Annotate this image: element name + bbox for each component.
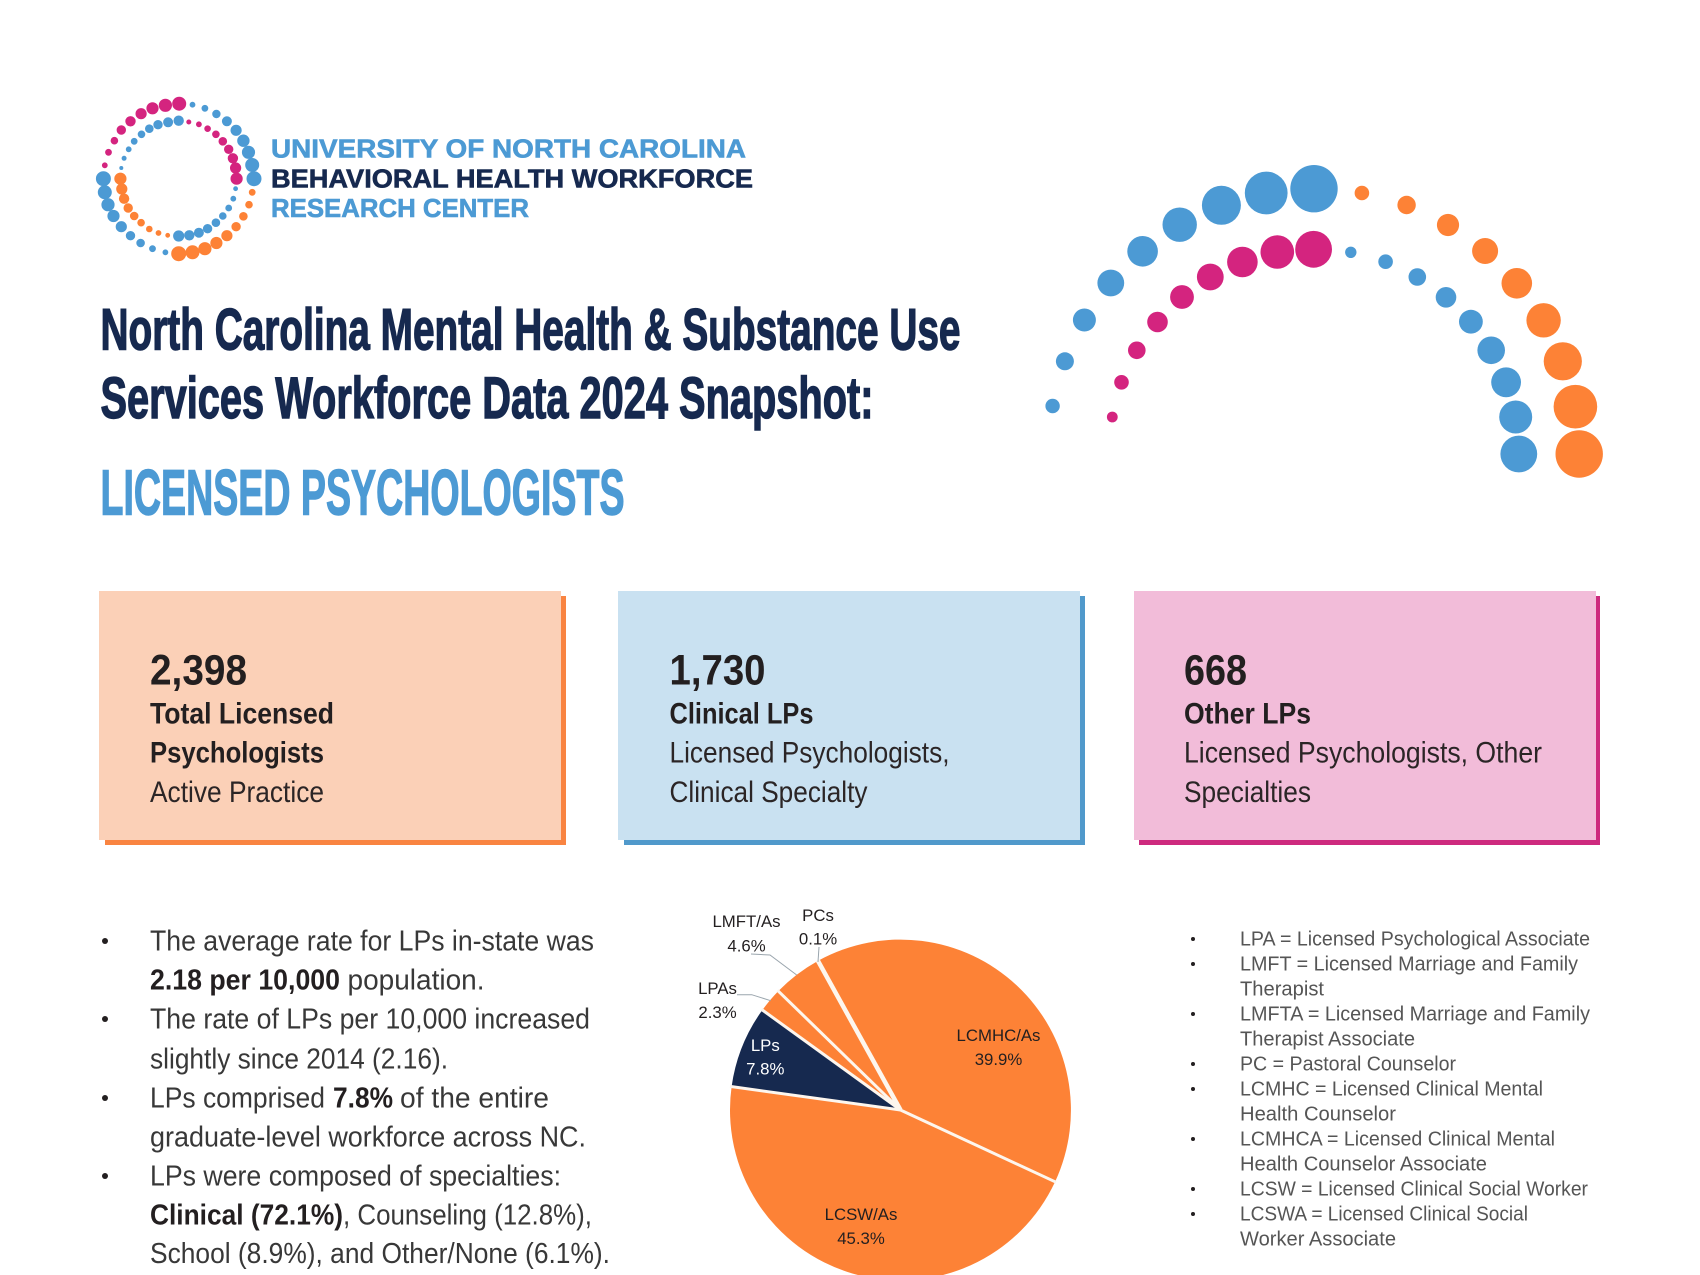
pie slices xyxy=(730,940,1071,1275)
leader lines xyxy=(737,947,819,1001)
panel: clinical LPs xyxy=(618,591,1085,845)
glossary text: LPA = Licensed Psychological Associate xyxy=(1240,928,1590,950)
pie labels: LPs xyxy=(751,1036,780,1055)
stat: 2,398: 2,398 xyxy=(150,646,247,694)
bullet: rate increase: slightly since 2014 (2.16). xyxy=(150,1043,448,1075)
text block: abbreviation glossary xyxy=(1191,928,1590,1250)
glossary text: Therapist xyxy=(1240,978,1324,1000)
bullet: share of workforce: of the entire xyxy=(400,1082,549,1114)
pie chart: graduate-level workforce composition xyxy=(698,906,1071,1275)
pie labels: 2.3% xyxy=(698,1003,737,1022)
label: clinical LPs: Licensed Psychologists, xyxy=(670,736,950,770)
glossary text: LCMHCA = Licensed Clinical Mental xyxy=(1240,1128,1555,1150)
glossary text: LCMHC = Licensed Clinical Mental xyxy=(1240,1078,1543,1100)
stat: 668: 668 xyxy=(1184,646,1247,694)
bullet: share of workforce: graduate-level workforce across NC. xyxy=(150,1122,586,1154)
subtitle: LICENSED PSYCHOLOGISTS xyxy=(100,456,624,528)
bullet: average rate: 2.18 per 10,000 xyxy=(150,964,340,996)
glossary text: PC = Pastoral Counselor xyxy=(1240,1054,1456,1076)
bullet: share of workforce: 7.8% xyxy=(333,1082,393,1114)
bullet: specialties: School (8.9%), and Other/None (6.1%). xyxy=(150,1238,610,1270)
glossary text: Worker Associate xyxy=(1240,1228,1396,1250)
glossary text: Health Counselor Associate xyxy=(1240,1154,1487,1176)
glossary text: Health Counselor xyxy=(1240,1104,1396,1126)
logo icon: dotted rings xyxy=(96,97,261,261)
label: other LPs: Specialties xyxy=(1184,776,1311,809)
label: total licensed psychologists: Total Licensed xyxy=(150,698,334,730)
label: other LPs xyxy=(1184,698,1542,809)
stat: 1,730: 1,730 xyxy=(670,646,766,694)
logo wordmark xyxy=(271,134,753,223)
glossary text: LCSWA = Licensed Clinical Social xyxy=(1240,1204,1528,1226)
pie labels: LCSW/As xyxy=(825,1205,897,1224)
logo: circular dots and research center name xyxy=(96,97,753,261)
pie labels xyxy=(698,906,1040,1248)
pie labels: LPAs xyxy=(698,979,737,998)
label: total licensed psychologists xyxy=(150,698,334,809)
label: total licensed psychologists: Psychologists xyxy=(150,736,324,770)
pie labels: 39.9% xyxy=(975,1050,1022,1069)
bullet: average rate xyxy=(102,925,594,996)
pie labels: 7.8% xyxy=(746,1059,785,1078)
title xyxy=(100,298,960,431)
glossary text: LCSW = Licensed Clinical Social Worker xyxy=(1240,1178,1588,1200)
bullet: share of workforce xyxy=(102,1082,586,1154)
label: total licensed psychologists: Active Practice xyxy=(150,776,324,809)
pie labels: 0.1% xyxy=(799,929,837,948)
bullet: average rate: The average rate for LPs in-state was xyxy=(150,925,594,957)
logo wordmark: UNIVERSITY OF NORTH CAROLINA xyxy=(271,134,746,164)
bullet: share of workforce: LPs comprised xyxy=(150,1082,325,1114)
panel: other LPs xyxy=(1134,591,1600,845)
text block: key findings bullets xyxy=(102,925,610,1270)
slice separators xyxy=(730,960,1056,1182)
bullet: specialties: LPs were composed of specialties: xyxy=(150,1160,561,1192)
glossary text: LMFTA = Licensed Marriage and Family xyxy=(1240,1004,1590,1026)
pie labels: LMFT/As xyxy=(712,912,781,931)
logo wordmark: RESEARCH CENTER xyxy=(271,193,529,223)
decorative dotted arc graphic xyxy=(1045,165,1603,478)
glossary text xyxy=(1240,928,1590,1250)
label: other LPs: Licensed Psychologists, Other xyxy=(1184,736,1542,770)
bullet: rate increase: The rate of LPs per 10,000 increased xyxy=(150,1004,590,1036)
bullet: specialties: Clinical (72.1%) xyxy=(150,1199,343,1231)
panel: total licensed psychologists xyxy=(99,591,566,845)
label: clinical LPs: Clinical Specialty xyxy=(670,776,868,809)
title: Services Workforce Data 2024 Snapshot: xyxy=(100,366,874,431)
label: clinical LPs xyxy=(670,698,950,809)
pie labels: 4.6% xyxy=(727,937,766,956)
bullet: rate increase xyxy=(102,1004,590,1075)
logo wordmark: BEHAVIORAL HEALTH WORKFORCE xyxy=(271,164,753,194)
pie labels: PCs xyxy=(802,906,834,925)
bullet: specialties: , Counseling (12.8%), xyxy=(343,1199,592,1231)
glossary bullets xyxy=(1191,937,1195,1216)
label: other LPs: Other LPs xyxy=(1184,698,1311,730)
glossary text: LMFT = Licensed Marriage and Family xyxy=(1240,954,1578,976)
bullet: specialties xyxy=(102,1160,610,1270)
label: clinical LPs: Clinical LPs xyxy=(670,698,814,730)
title: North Carolina Mental Health & Substance Use xyxy=(100,298,960,363)
glossary text: Therapist Associate xyxy=(1240,1028,1415,1050)
pie labels: 45.3% xyxy=(837,1229,885,1248)
pie labels: LCMHC/As xyxy=(957,1026,1040,1045)
bullet: average rate: population. xyxy=(348,964,484,996)
